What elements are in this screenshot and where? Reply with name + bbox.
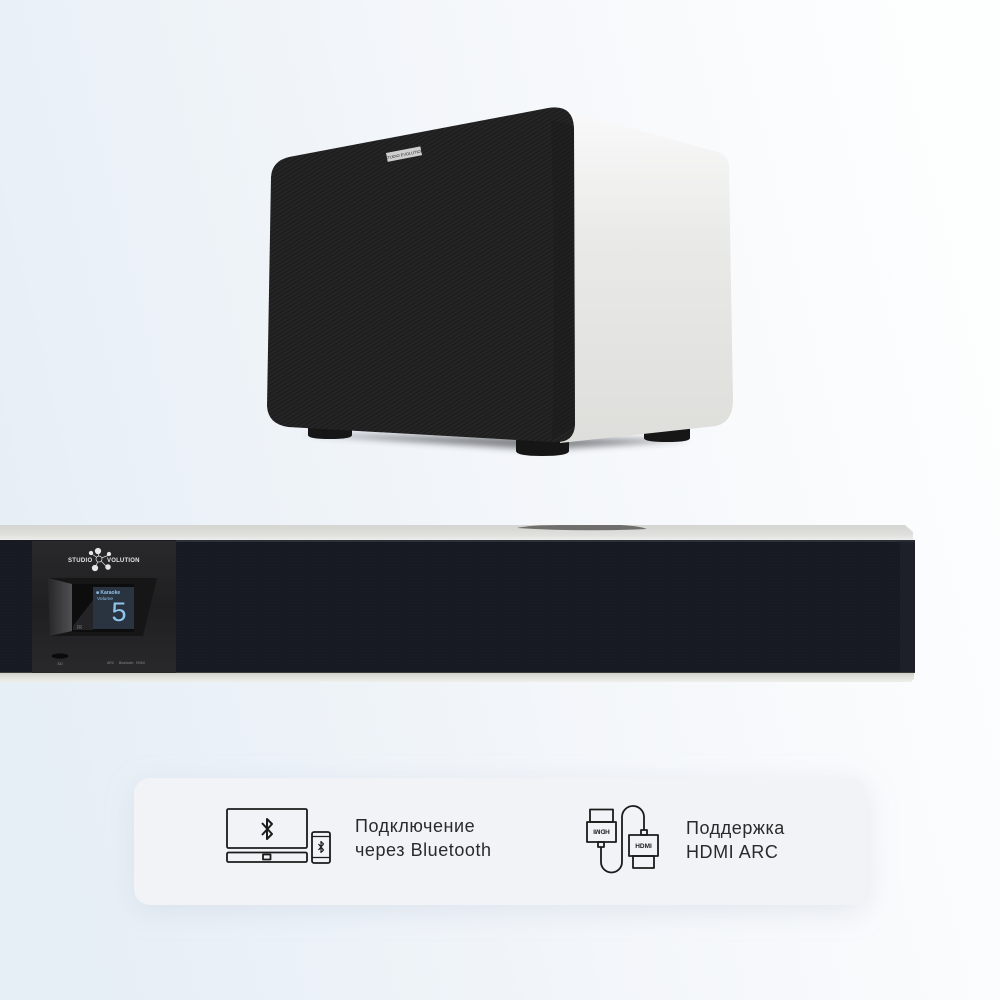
floor shadow [300,434,690,450]
LCD screen [93,587,134,629]
text: HDMI ARC: Поддержка [686,818,785,838]
fabric edge fold [551,120,575,440]
SD slot [52,653,68,659]
icon: HDMI cable: HDMI [593,828,610,834]
subwoofer feet [308,424,690,456]
feature card [134,778,867,905]
display window [72,584,134,632]
subwoofer fabric front [267,107,575,442]
subwoofer speaker [267,107,733,456]
SD label: SD [57,661,63,666]
soundbar fabric grille [0,540,915,673]
text: HDMI ARC: HDMI ARC [686,842,778,862]
input labels [107,661,145,665]
text: Bluetooth: через Bluetooth [355,840,492,860]
soundbar bottom lip [0,672,914,682]
screen title: ■ Karaoke [96,590,120,596]
screen value: 5 [111,597,127,627]
icon: Bluetooth devices [227,809,330,863]
icon: HDMI cable: HDMI [635,843,652,850]
text: Bluetooth: Подключение [355,816,475,836]
Studio Evolution logo: VOLUTION [107,558,140,564]
screen label: Volume [97,596,113,602]
recess flap [48,578,72,636]
Studio Evolution logo: STUDIO [68,558,92,564]
top control oval [517,525,647,530]
soundbar centre control panel [32,541,176,673]
subwoofer logo badge: STUDIO EVOLUTION [384,148,424,161]
IR label: IR [77,625,82,631]
input labels: Bluetooth [119,661,133,665]
soundbar top surface [0,525,913,541]
subwoofer white side [560,111,733,443]
display recess [50,578,157,636]
icon: HDMI cable [587,806,658,872]
input labels: ARC [107,661,115,665]
soundbar [0,525,915,682]
Studio Evolution logo [68,548,140,571]
input labels: HDMI [136,661,145,665]
